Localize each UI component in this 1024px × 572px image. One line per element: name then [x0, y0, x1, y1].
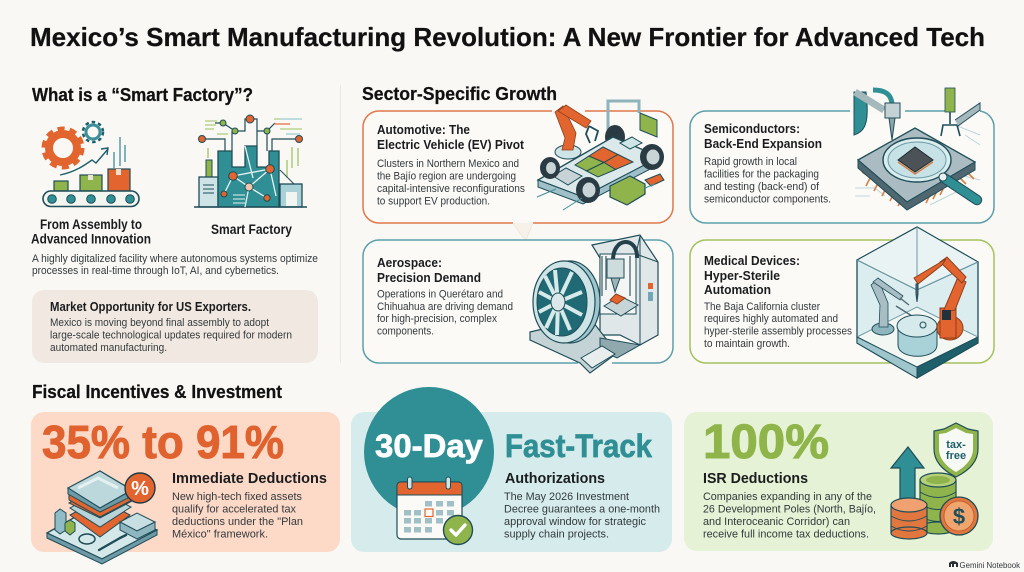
card: 30-day fast-track: Fast-Track: [505, 428, 652, 464]
card: medical devices: to maintain growth.: [704, 338, 790, 350]
heading: sector-specific growth: Sector-Specific Growth: [362, 84, 557, 104]
icon: microchip under magnifier: [854, 88, 980, 210]
card: aerospace: for high-precision, complex: [377, 313, 497, 325]
card: immediate deductions: México" framework.: [172, 528, 268, 540]
caption: smart factory: Smart Factory: [211, 222, 292, 237]
card: aerospace: components.: [377, 326, 434, 338]
icon: arrow, shield and coins: tax-: [946, 439, 966, 451]
card: semiconductors: [690, 88, 994, 223]
icon: arrow, shield and coins: $: [953, 504, 965, 529]
caption: from assembly to advanced innovation: From Assembly to: [40, 217, 142, 232]
card: 30-day fast-track: [351, 387, 672, 552]
card: medical devices: [690, 227, 994, 378]
caption: from assembly to advanced innovation: [31, 217, 151, 246]
description: smart factory definition: processes in real-time through IoT, AI, and cybernetics.: [32, 265, 279, 277]
card: immediate deductions: Immediate Deductions: [172, 470, 327, 487]
card: isr deductions: Companies expanding in any of the: [703, 491, 872, 503]
panel: market opportunity: Market Opportunity for US Exporters.: [50, 300, 251, 314]
card: immediate deductions: [31, 412, 340, 564]
card: immediate deductions: New high-tech fixed assets: [172, 491, 302, 503]
card: medical devices: requires highly automated and: [704, 313, 838, 325]
card: automotive: Automotive: The: [377, 122, 470, 137]
card: immediate deductions: 35% to 91%: [42, 416, 284, 468]
card: isr deductions: 26 Development Poles (North, Bajío,: [703, 504, 876, 516]
icon: arrow, shield and coins: free: [946, 450, 966, 462]
icon: turbine and cnc machine: [530, 235, 658, 373]
card: immediate deductions: qualify for accelerated tax: [172, 504, 296, 516]
heading: fiscal incentives: Fiscal Incentives & Investment: [32, 382, 282, 402]
card: semiconductors: facilities for the packaging: [704, 168, 819, 180]
card: medical devices: hyper-sterile assembly processes: [704, 326, 852, 338]
card: medical devices: The Baja California cluster: [704, 301, 820, 313]
card: automotive: Electric Vehicle (EV) Pivot: [377, 137, 525, 152]
card: isr deductions: and Interoceanic Corridor) can: [703, 516, 850, 528]
card: medical devices: Hyper-Sterile: [704, 268, 780, 283]
icon: conveyor with gears: [43, 122, 139, 206]
icon: smart factory network: [194, 115, 307, 207]
panel: market opportunity: [32, 290, 318, 363]
panel: market opportunity: large-scale technological updates required for modern: [50, 330, 292, 342]
description: smart factory definition: [32, 253, 318, 277]
icon: stacked assets with percent badge: [47, 471, 157, 564]
card: semiconductors: Back-End Expansion: [704, 136, 822, 151]
card: isr deductions: ISR Deductions: [703, 470, 808, 487]
card: automotive: [363, 101, 673, 240]
card: 30-day fast-track: 30-Day: [375, 428, 483, 464]
icon: sterile glass cube with robots: [857, 227, 978, 378]
card: 30-day fast-track: approval window for strategic: [504, 516, 646, 528]
card: isr deductions: [684, 412, 993, 551]
card: 30-day fast-track: supply chain projects.: [504, 528, 609, 540]
card: isr deductions: receive full income tax deductions.: [703, 528, 869, 540]
title: Mexico’s Smart Manufacturing Revolution: A New Frontier for Advanced Tech: [30, 22, 985, 52]
panel: market opportunity: automated manufacturing.: [50, 342, 167, 354]
icon: calendar with checkmark: [397, 477, 472, 544]
card: aerospace: [363, 235, 673, 373]
heading: what is a smart factory: What is a “Smart Factory”?: [32, 85, 253, 105]
section: what is a smart factory: [31, 85, 318, 363]
card: 30-day fast-track: The May 2026 Investment: [504, 491, 629, 503]
icon: arrow, shield and coins: [891, 423, 978, 539]
card: semiconductors: Rapid growth in local: [704, 156, 797, 168]
card: automotive: to support EV production.: [377, 196, 490, 208]
card: immediate deductions: deductions under the "Plan: [172, 516, 303, 528]
card: aerospace: Chihuahua are driving demand: [377, 301, 513, 313]
card: aerospace: Operations in Querétaro and: [377, 288, 503, 300]
icon: stacked assets with percent badge: %: [131, 478, 149, 500]
card: automotive: the Bajío region are undergoing: [377, 170, 516, 182]
icon: ev chassis with robot arm: [537, 101, 664, 210]
card: semiconductors: semiconductor components.: [704, 194, 831, 206]
card: semiconductors: Semiconductors:: [704, 121, 800, 136]
card: medical devices: Medical Devices:: [704, 253, 800, 268]
panel: market opportunity: Mexico is moving beyond final assembly to adopt: [50, 317, 269, 329]
caption: from assembly to advanced innovation: Advanced Innovation: [31, 232, 151, 246]
card: medical devices: Automation: [704, 282, 771, 297]
watermark: gemini notebook: Gemini Notebook: [960, 561, 1021, 570]
card: aerospace: Precision Demand: [377, 270, 481, 285]
card: automotive: Clusters in Northern Mexico and: [377, 158, 519, 170]
card: automotive: capital-intensive reconfigurations: [377, 183, 525, 195]
card: 30-day fast-track: Decree guarantees a one-month: [504, 504, 660, 516]
card: 30-day fast-track: Authorizations: [505, 470, 605, 487]
card: aerospace: Aerospace:: [377, 255, 442, 270]
description: smart factory definition: A highly digitalized facility where autonomous systems optimize: [32, 253, 318, 265]
card: isr deductions: 100%: [703, 416, 829, 469]
card: semiconductors: and testing (back-end) of: [704, 181, 820, 193]
